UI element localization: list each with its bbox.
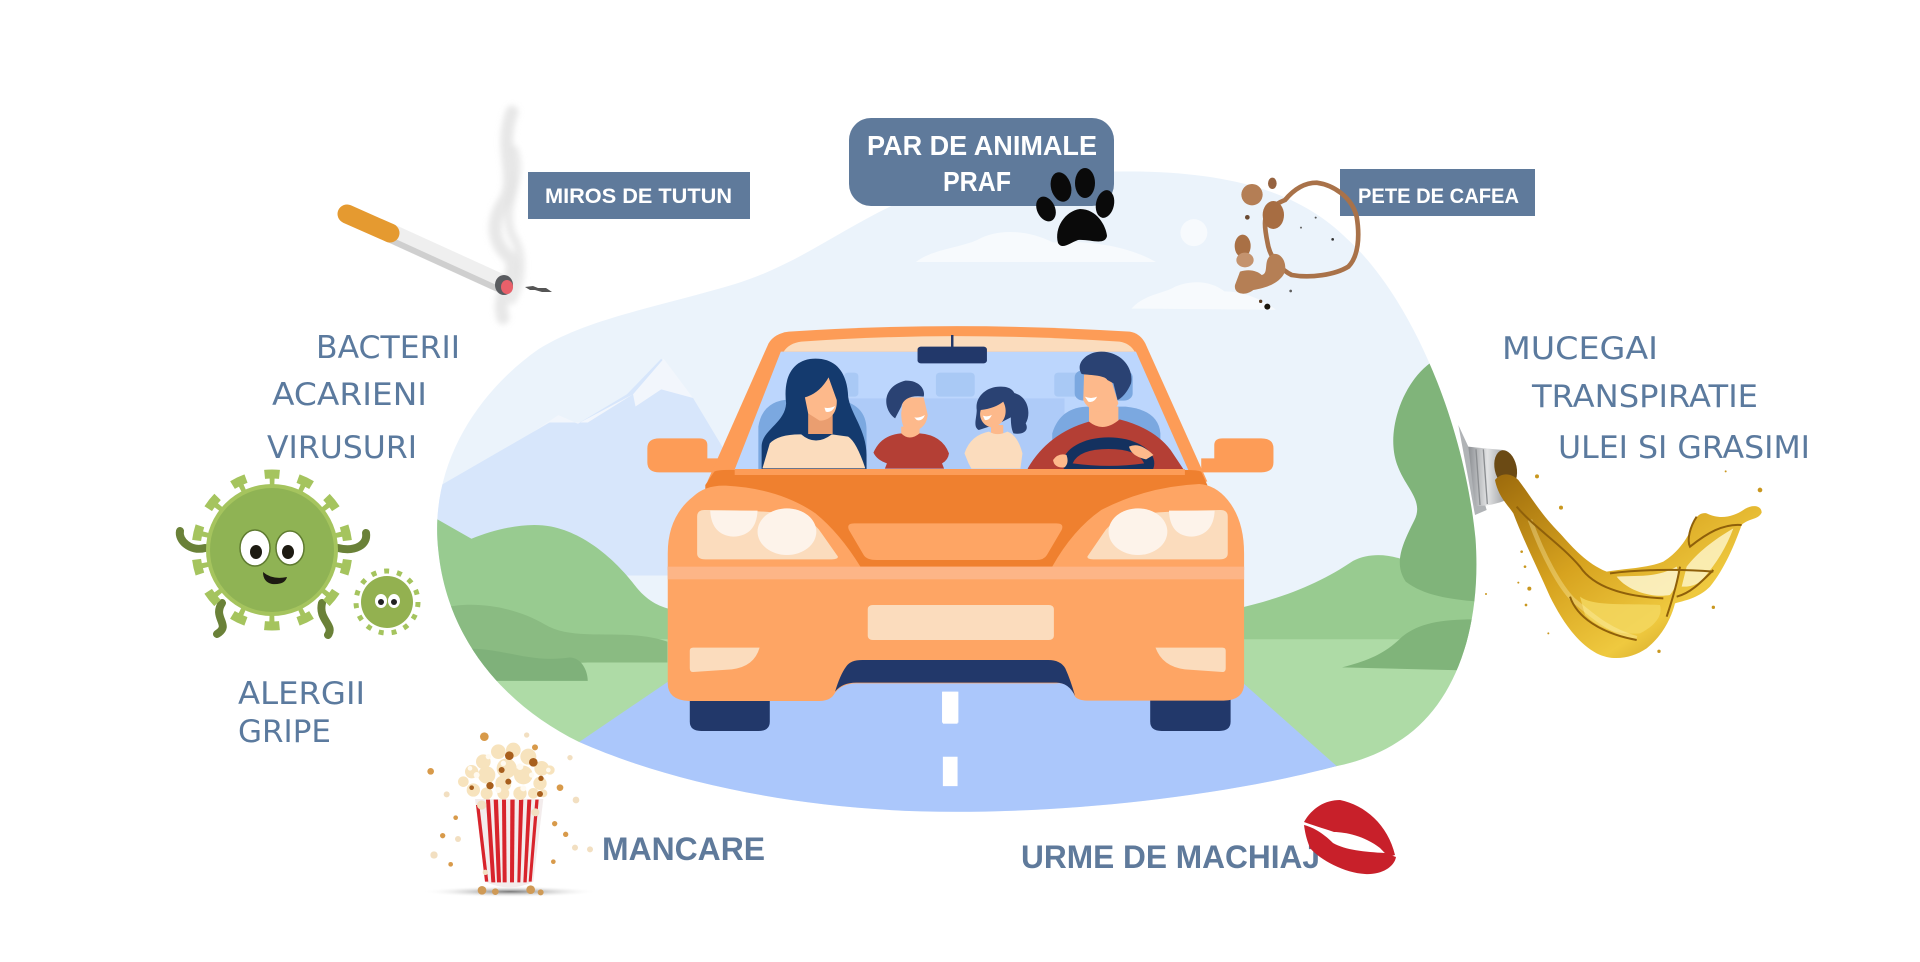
smoke (495, 112, 521, 318)
sun strip (784, 336, 1135, 352)
droplets (1485, 470, 1762, 653)
fender right (1052, 484, 1244, 570)
bottle (1458, 425, 1487, 515)
snow caps (550, 360, 693, 424)
icon: virus characters (180, 474, 418, 635)
icon: cigarette (347, 112, 552, 318)
illustration: landscape blob (416, 159, 1494, 833)
text: right contaminants (1502, 331, 1810, 466)
highlights (1580, 597, 1661, 634)
label: par de animale, praf: PAR DE ANIMALE (867, 130, 1097, 161)
icon: paw print (1032, 168, 1117, 246)
bumper stripe (668, 567, 1244, 579)
boy (873, 381, 949, 469)
grille (848, 523, 1062, 560)
fender left (668, 486, 860, 570)
label: pete de cafea: PETE DE CAFEA (1358, 185, 1519, 208)
dash strip (735, 469, 1185, 475)
girl (964, 387, 1028, 469)
steering wheel (1063, 437, 1154, 489)
side mirrors (647, 438, 1273, 472)
label: mancare: MANCARE (602, 831, 765, 867)
icon: oil pouring (1458, 425, 1762, 658)
popcorn pile (458, 743, 555, 800)
ember (495, 275, 513, 295)
label: par de animale, praf: PRAF (943, 166, 1011, 197)
cap (1468, 447, 1507, 506)
air intake (835, 660, 1075, 696)
fog lamps (690, 648, 1226, 672)
left hill (429, 514, 673, 686)
big virus spikes (196, 474, 348, 626)
right hill (1237, 555, 1488, 649)
lower hill (463, 649, 588, 681)
back seat (844, 398, 1064, 472)
woman (762, 359, 867, 470)
text: left contaminants (238, 330, 460, 750)
eyes (240, 530, 270, 566)
hood (705, 470, 1207, 570)
lower body (668, 567, 1244, 701)
text: left contaminants: ALERGII (238, 676, 365, 712)
wheels (690, 697, 1231, 731)
cigarette body (388, 232, 500, 283)
front seats (758, 370, 1160, 472)
headrests (844, 373, 1083, 397)
mouth (263, 572, 287, 584)
icon: lipstick kiss (1304, 800, 1396, 874)
ash (525, 286, 552, 292)
label: par de animale, praf (849, 118, 1114, 206)
sun (1180, 219, 1207, 246)
label: urme de machiaj: URME DE MACHIAJ (1021, 839, 1320, 875)
left headlight (697, 508, 838, 559)
mid hill (441, 605, 667, 667)
text: right contaminants: TRANSPIRATIE (1531, 379, 1758, 415)
text: left contaminants: GRIPE (238, 714, 331, 750)
text: left contaminants: BACTERII (316, 330, 460, 366)
bucket (475, 799, 543, 887)
right headlight (1087, 508, 1228, 559)
scattered kernels (427, 732, 568, 867)
lane marks (943, 692, 958, 786)
mountains (438, 359, 722, 576)
rear view mirror (918, 335, 987, 363)
text: right contaminants: MUCEGAI (1502, 331, 1658, 367)
oil stream (1495, 474, 1762, 658)
veins (1517, 507, 1742, 640)
lane dash (942, 692, 958, 723)
limbs (180, 531, 366, 635)
text: left contaminants: ACARIENI (272, 377, 427, 413)
right lower bush (1342, 619, 1472, 670)
right ground (1244, 639, 1468, 770)
small virus (356, 571, 418, 633)
road (579, 682, 1336, 812)
stripes (476, 800, 539, 882)
shadow (422, 886, 598, 897)
right bush (1393, 364, 1476, 602)
man (1028, 352, 1186, 489)
cabin frame (707, 326, 1207, 482)
windshield (734, 352, 1189, 472)
label: pete de cafea (1340, 169, 1535, 216)
filter (347, 214, 390, 233)
text: left contaminants: VIRUSURI (267, 430, 417, 466)
icon: popcorn bucket (422, 732, 598, 897)
left ground (466, 639, 668, 742)
sky (442, 172, 1430, 608)
big virus body (206, 484, 338, 616)
icon: coffee stains (1235, 178, 1358, 310)
license plate (868, 605, 1054, 640)
text: right contaminants: ULEI SI GRASIMI (1558, 430, 1810, 466)
label: miros de tutun (528, 172, 750, 219)
clouds (916, 232, 1156, 262)
illustration: car with family (647, 326, 1273, 731)
label: miros de tutun: MIROS DE TUTUN (545, 185, 732, 208)
cloud small (1131, 282, 1276, 310)
